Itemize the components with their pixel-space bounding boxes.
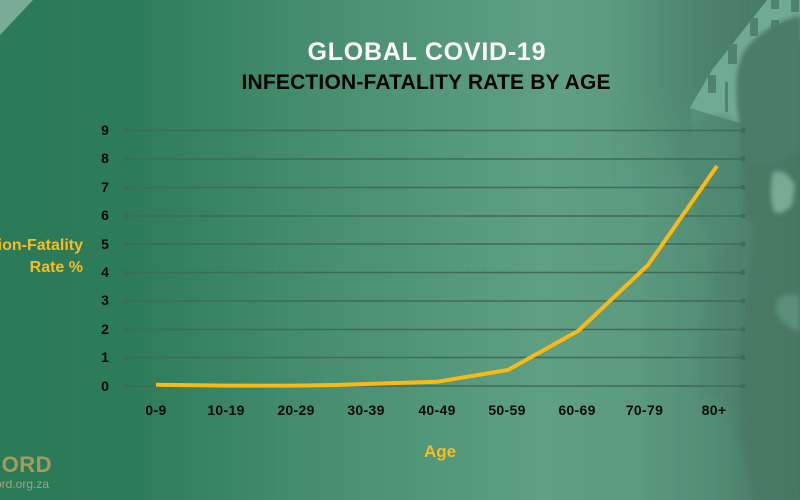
line chart <box>101 122 745 418</box>
protester arm <box>690 240 745 470</box>
x axis categories: 0-9 <box>145 402 167 418</box>
title <box>242 38 610 94</box>
y axis values: 6 <box>101 207 109 223</box>
x axis categories <box>145 402 726 418</box>
x axis title: Age <box>424 442 456 461</box>
x axis categories: 40-49 <box>418 402 456 418</box>
protester head and body <box>737 15 800 500</box>
x axis categories: 10-19 <box>207 402 245 418</box>
x axis categories: 60-69 <box>558 402 596 418</box>
y axis values: 3 <box>101 292 109 308</box>
x axis categories: 30-39 <box>347 402 385 418</box>
y axis values: 8 <box>101 150 109 166</box>
background photo: building and protester <box>652 0 800 492</box>
protester face highlight <box>771 171 795 213</box>
title line 1: GLOBAL COVID-19 <box>308 38 546 66</box>
y axis values: 5 <box>101 236 109 252</box>
logo <box>0 452 52 491</box>
y axis values: 0 <box>101 378 109 394</box>
protester hair <box>739 18 800 165</box>
data line <box>156 166 717 386</box>
y axis values: 9 <box>101 122 109 138</box>
y axis values <box>101 122 109 394</box>
x axis categories: 70-79 <box>626 402 663 418</box>
x axis categories: 80+ <box>702 402 726 418</box>
building windows <box>708 0 799 93</box>
y axis values: 1 <box>101 349 109 365</box>
crowd silhouettes <box>670 114 748 245</box>
building facade <box>690 0 800 125</box>
grid lines <box>124 129 745 388</box>
logo: ORD <box>2 452 52 477</box>
y axis values: 2 <box>101 321 109 337</box>
dark wedge <box>652 0 736 116</box>
x axis categories: 20-29 <box>277 402 315 418</box>
y axis values: 7 <box>101 179 109 195</box>
corner accent <box>0 0 33 35</box>
street lamp <box>725 82 728 112</box>
protester hand <box>775 294 800 332</box>
x axis categories: 50-59 <box>488 402 526 418</box>
y axis title: Rate % <box>30 259 83 276</box>
title line 2: INFECTION-FATALITY RATE BY AGE <box>242 71 610 94</box>
y axis title <box>0 237 83 276</box>
y axis values: 4 <box>101 264 109 280</box>
